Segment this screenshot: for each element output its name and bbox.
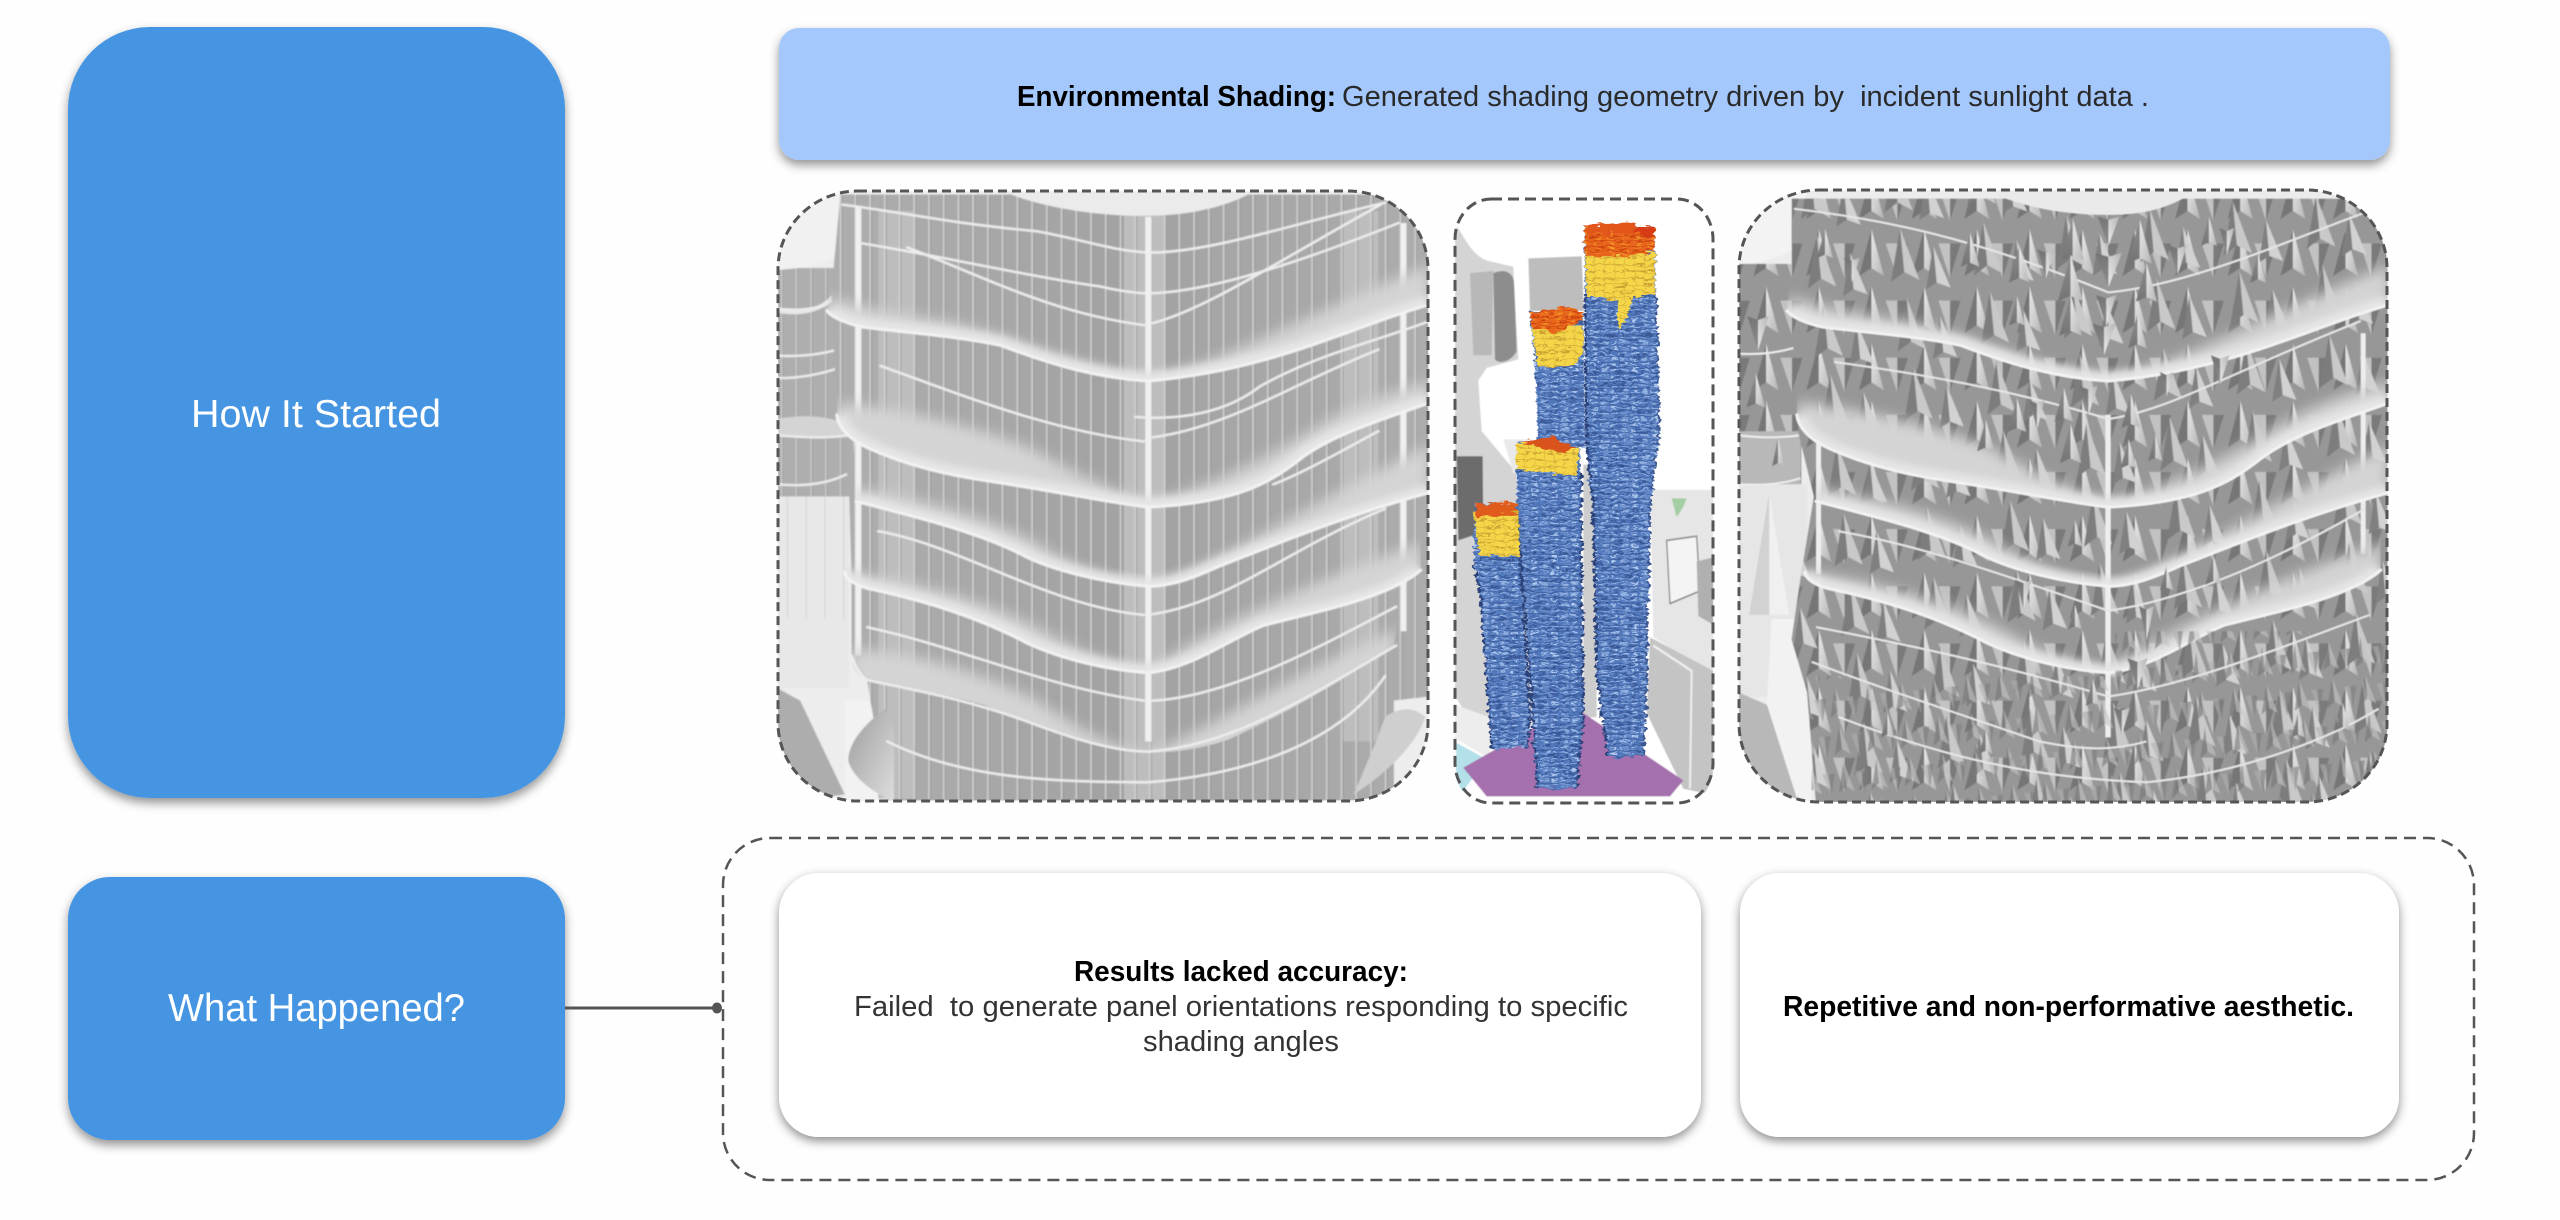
card: results lacked accuracy xyxy=(779,873,1701,1137)
top slab xyxy=(1012,194,1248,216)
floor plates xyxy=(1787,265,2390,687)
bottom fins xyxy=(1812,676,2124,807)
dashed frame: image 2 xyxy=(1455,199,1713,803)
hero fins xyxy=(1817,217,2350,754)
image: solar analysis towers xyxy=(1455,220,1714,797)
card heading: Results lacked accuracy: xyxy=(1074,956,1408,988)
panel: How It Started xyxy=(68,27,565,798)
dashed group frame xyxy=(723,838,2474,1180)
edge rails xyxy=(843,203,1430,782)
card text: Repetitive and non-performative aesthetic. xyxy=(1783,991,2354,1023)
image: smooth floor plates facade xyxy=(778,191,1428,801)
context buildings xyxy=(1455,225,1533,747)
towers xyxy=(1473,223,1659,789)
banner: Environmental Shading xyxy=(779,28,2390,160)
banner text: Environmental Shading: xyxy=(1017,81,1336,113)
pillars xyxy=(855,207,1408,666)
dashed frame: image 1 xyxy=(778,191,1428,801)
card body xyxy=(854,991,1628,1058)
image: triangular shading panels facade xyxy=(1738,190,2388,802)
main tower with shading fins xyxy=(1792,199,2396,807)
main tower body xyxy=(831,194,1430,801)
card: repetitive aesthetic xyxy=(1740,873,2399,1137)
heading: What Happened?: What Happened? xyxy=(168,987,465,1030)
panel: What Happened xyxy=(68,877,565,1140)
left neighbouring tower xyxy=(1739,264,1801,484)
card body: Failed to generate panel orientations responding to specific xyxy=(854,991,1628,1023)
banner text: Generated shading geometry driven by incident sunlight data . xyxy=(1342,81,2149,113)
base slab tips xyxy=(848,709,894,803)
card body: shading angles xyxy=(1143,1026,1339,1058)
left neighbouring tower xyxy=(778,268,854,497)
connector arrow xyxy=(565,1002,722,1014)
floors xyxy=(827,265,1430,687)
heading: How It Started: How It Started xyxy=(191,393,441,436)
dashed frame: image 3 xyxy=(1739,190,2387,802)
